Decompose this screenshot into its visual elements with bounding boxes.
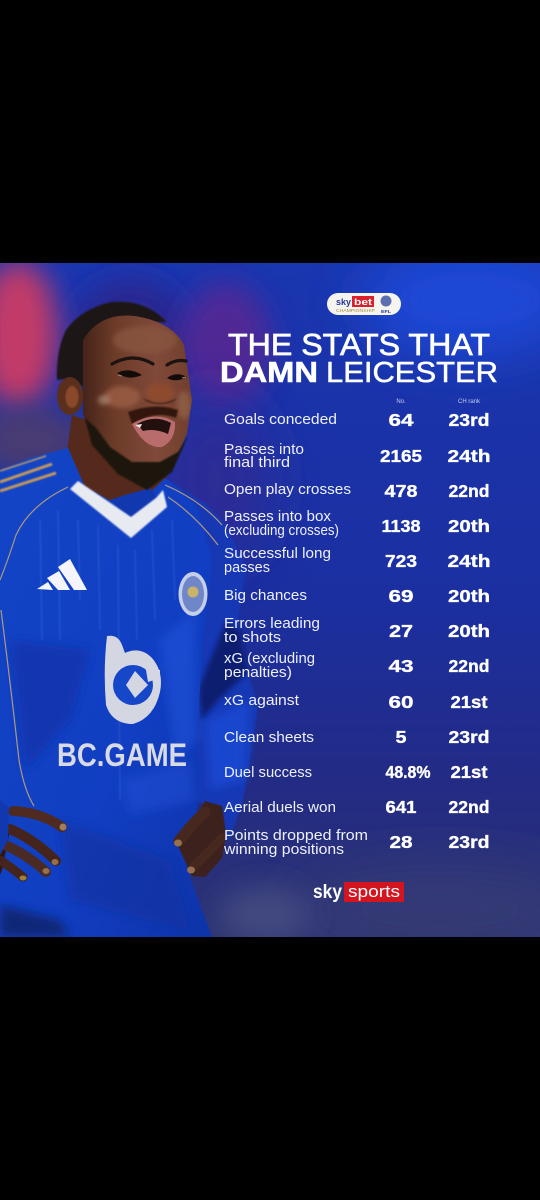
arm shadow bbox=[198, 622, 248, 720]
row: errors leading to shots: 20th bbox=[448, 621, 490, 641]
sponsor b logo bbox=[105, 636, 161, 724]
row: clean sheets bbox=[224, 727, 490, 747]
row: xG against: xG against bbox=[224, 693, 299, 709]
jersey shadow folds bbox=[0, 610, 250, 937]
player photo bbox=[0, 302, 258, 937]
heading bbox=[222, 333, 497, 382]
row: successful long passes: 723 bbox=[385, 551, 417, 571]
logo: sky sports: sports bbox=[348, 882, 400, 901]
logo: sky bet championship EFL: CHAMPIONSHIP bbox=[336, 308, 375, 313]
row: aerial duels won: 641 bbox=[386, 797, 417, 817]
row: xG against: 21st bbox=[450, 692, 488, 712]
stats table bbox=[223, 410, 491, 858]
heading: LEICESTER bbox=[326, 357, 498, 389]
white V collar bbox=[70, 481, 167, 538]
jersey piping bbox=[0, 485, 222, 806]
sponsor wordmark: BC.GAME bbox=[57, 737, 187, 773]
row: xG excluding penalties: 43 bbox=[388, 656, 414, 676]
row: xG excluding penalties: 22nd bbox=[448, 656, 490, 676]
panel: infographic image bbox=[0, 245, 540, 950]
club crest bbox=[178, 572, 208, 616]
left hand bbox=[0, 811, 66, 880]
row: points dropped: 28 bbox=[390, 832, 413, 852]
nose bbox=[143, 398, 177, 404]
logo: sky bet championship EFL bbox=[327, 293, 401, 315]
row: goals conceded: 64 bbox=[388, 410, 414, 430]
row: open play crosses: Open play crosses bbox=[224, 482, 351, 498]
column headers: CH rank bbox=[458, 399, 481, 405]
row: points dropped: 23rd bbox=[448, 832, 490, 852]
row: duel success: Duel success bbox=[224, 765, 312, 781]
row: big chances: Big chances bbox=[224, 588, 307, 604]
row: errors leading to shots bbox=[224, 616, 490, 646]
row: goals conceded bbox=[224, 412, 488, 426]
row: errors leading to shots: 27 bbox=[389, 621, 413, 641]
row: successful long passes: passes bbox=[224, 560, 270, 576]
row: successful long passes bbox=[224, 546, 490, 576]
row: passes into box: (excluding crosses) bbox=[224, 523, 339, 539]
row: aerial duels won bbox=[224, 797, 490, 817]
row: open play crosses: 22nd bbox=[448, 481, 490, 501]
beard bbox=[85, 418, 188, 490]
head bbox=[83, 316, 192, 462]
eyebrows bbox=[112, 358, 186, 365]
row: clean sheets: Clean sheets bbox=[224, 730, 314, 746]
logo: sky sports: sky bbox=[313, 882, 342, 903]
row: passes into box: 20th bbox=[448, 516, 490, 536]
heading: DAMN bbox=[220, 357, 318, 389]
eyes bbox=[117, 370, 187, 380]
row: passes into final third bbox=[224, 443, 490, 467]
row: successful long passes: 24th bbox=[448, 551, 490, 571]
left arm cuff bbox=[0, 800, 9, 855]
row: goals conceded: 23rd bbox=[448, 410, 490, 430]
jersey pinstripes bbox=[40, 510, 175, 800]
row: errors leading to shots: Errors leading bbox=[224, 616, 320, 632]
row: xG against: 60 bbox=[388, 692, 414, 712]
row: xG excluding penalties bbox=[224, 651, 490, 681]
logo: sky sports bbox=[313, 882, 404, 903]
row: big chances: 20th bbox=[448, 586, 490, 606]
row: points dropped: Points dropped from bbox=[224, 828, 368, 844]
right arm sleeve bbox=[165, 478, 258, 842]
row: open play crosses bbox=[224, 483, 488, 498]
row: xG excluding penalties: penalties) bbox=[224, 665, 292, 681]
row: passes into box: 1138 bbox=[382, 516, 421, 536]
column headers bbox=[396, 398, 480, 403]
logo: sky bet championship EFL: sky bbox=[336, 297, 351, 307]
inner collar bbox=[110, 488, 156, 519]
column headers: No. bbox=[396, 399, 406, 405]
row: big chances: 69 bbox=[388, 586, 414, 606]
row: clean sheets: 23rd bbox=[448, 727, 490, 747]
moustache shadow bbox=[128, 406, 178, 424]
row: passes into box: Passes into box bbox=[224, 509, 332, 525]
row: successful long passes: Successful long bbox=[224, 546, 331, 562]
blurred stadium background bbox=[0, 245, 540, 950]
logo: sky bet championship EFL: bet bbox=[354, 297, 372, 307]
row: xG against bbox=[224, 692, 488, 712]
row: passes into box bbox=[224, 509, 490, 539]
jersey torso bbox=[0, 448, 212, 937]
row: xG excluding penalties: xG (excluding bbox=[224, 651, 315, 667]
row: duel success: 48.8% bbox=[386, 762, 431, 782]
row: points dropped bbox=[223, 828, 490, 858]
hair bbox=[57, 302, 167, 388]
adidas logo bbox=[37, 559, 87, 590]
right hand bbox=[174, 801, 226, 877]
row: goals conceded: Goals conceded bbox=[224, 412, 337, 428]
row: points dropped: winning positions bbox=[223, 842, 344, 858]
mouth bbox=[132, 416, 175, 447]
heading: THE STATS THAT bbox=[228, 328, 490, 362]
row: passes into final third: final third bbox=[224, 455, 290, 471]
face highlights bbox=[98, 326, 191, 419]
row: passes into final third: Passes into bbox=[224, 442, 304, 458]
row: duel success: 21st bbox=[450, 762, 488, 782]
row: aerial duels won: 22nd bbox=[448, 797, 490, 817]
row: big chances bbox=[225, 588, 489, 603]
shoulder gold stripes bbox=[0, 456, 56, 491]
row: duel success bbox=[224, 762, 488, 782]
row: errors leading to shots: to shots bbox=[224, 630, 281, 646]
neck bbox=[68, 415, 168, 502]
logo: sky bet championship EFL: EFL bbox=[381, 309, 391, 314]
row: aerial duels won: Aerial duels won bbox=[224, 800, 336, 816]
row: passes into final third: 24th bbox=[448, 446, 490, 466]
ear bbox=[57, 377, 83, 415]
row: open play crosses: 478 bbox=[384, 481, 418, 501]
row: passes into final third: 2165 bbox=[380, 446, 422, 466]
row: clean sheets: 5 bbox=[396, 727, 407, 747]
